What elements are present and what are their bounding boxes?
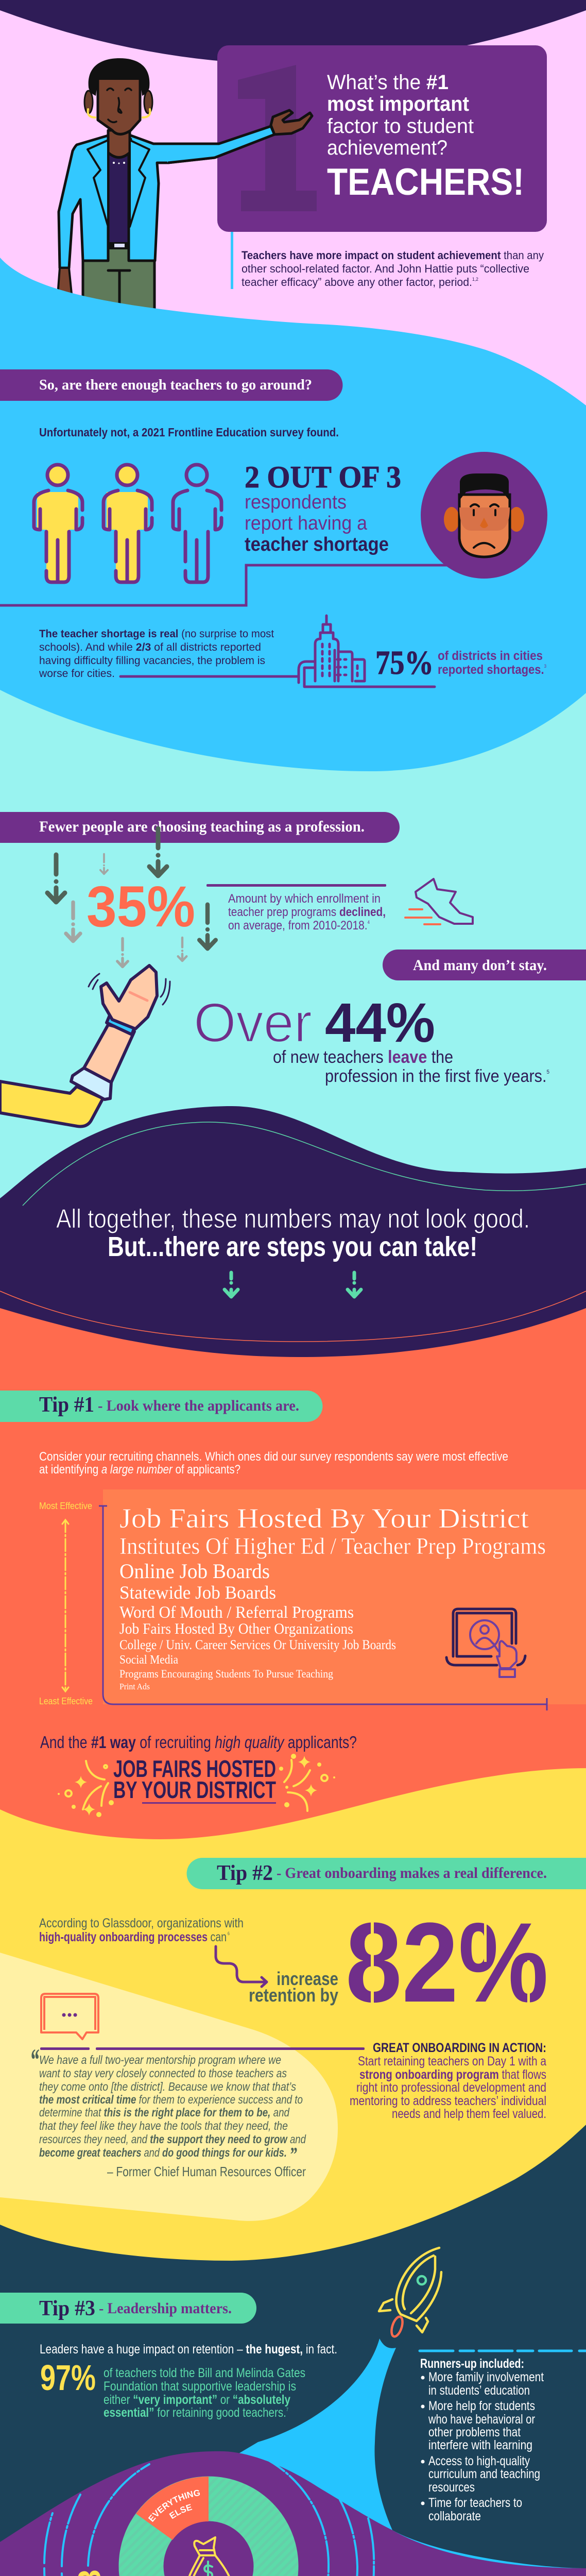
axis: most to least effective [39, 1501, 93, 1706]
heading: enough teachers [0, 369, 343, 401]
panel: navy transition wave: But...there are steps you can take! [108, 1231, 477, 1262]
ranked list of channels: Statewide Job Boards [119, 1582, 276, 1603]
donut chart: district budget share: EVERYTHING [148, 2489, 200, 2522]
stat: 97 percent: either “very important” or “absolutely [104, 2393, 290, 2407]
stat: over 44 percent: profession in the first five years. [325, 1066, 571, 1086]
stat: 2 out of 3 [245, 460, 401, 555]
headline question: factor to student [327, 115, 474, 138]
ranked list of channels: Job Fairs Hosted By Your District [119, 1503, 529, 1534]
icons: falling arrows [47, 828, 216, 967]
list: runners-up: More family involvement [428, 2370, 544, 2384]
stat: over 44 percent: Over [194, 991, 312, 1054]
heading: tip 2: - Great onboarding makes a real difference. [277, 1865, 547, 1882]
icons: green arrows [225, 1273, 361, 1297]
text: glassdoor finding: 6 [227, 1931, 230, 1936]
text block: great onboarding in action: needs and help them feel valued. [392, 2107, 546, 2121]
panel: headline card [157, 45, 547, 232]
axis: most to least effective: Most Effective [39, 1501, 92, 1511]
text block: teacher shortage: worse for cities. [39, 668, 115, 680]
text block: great onboarding in action [350, 2041, 546, 2121]
headline question: most important [327, 93, 469, 115]
stat: 75 percent: reported shortages. [438, 663, 559, 677]
text block: teacher shortage [39, 628, 274, 680]
text block: teacher impact [231, 232, 544, 289]
text block: mentorship quote: resources they need, and the support they need to grow and [39, 2132, 306, 2146]
axis: most to least effective: Least Effective [39, 1696, 93, 1706]
stat: 97 percent: essential” for retaining good teachers. [104, 2405, 315, 2420]
callout: job fairs hosted by your district: BY YOUR DISTRICT [113, 1776, 276, 1803]
headline question: achievement? [327, 137, 447, 159]
text block: teacher impact: teacher efficacy” above any other factor, period. [242, 276, 480, 289]
heading: tip 2: Tip #2 [217, 1861, 273, 1885]
donut chart: district budget share: ELSE [169, 2504, 193, 2519]
stat: 75 percent [375, 644, 546, 682]
stat: 97 percent: 7 [286, 2407, 288, 2412]
stat: over 44 percent: 44% [325, 991, 435, 1054]
text block: great onboarding in action: GREAT ONBOARDING IN ACTION: [373, 2041, 546, 2055]
icon: running shoe [405, 879, 473, 924]
text block: teacher shortage: schools). And while 2/3 of all districts reported [39, 641, 261, 653]
list: runners-up: other problems that [428, 2425, 521, 2439]
headline answer: TEACHERS! [327, 161, 524, 203]
text block: mentorship quote: want to stay very closely connected to those teachers as [39, 2066, 287, 2080]
text: glassdoor finding [39, 1916, 244, 1944]
heading: tip 1: Tip #1 [39, 1393, 94, 1417]
background: blue flame and section [0, 2338, 586, 2576]
background: yellow section [0, 1768, 586, 2267]
stat: 2 out of 3: report having a [245, 513, 368, 534]
background: navy top curve [0, 0, 586, 64]
text: glassdoor finding: high-quality onboarding processes can [39, 1930, 254, 1944]
ranked list of channels: College / Univ. Career Services Or University Job Boards [119, 1637, 396, 1652]
background: blue section [0, 258, 586, 771]
panel: navy transition wave [0, 1106, 586, 1357]
stat: 75 percent: 75% [375, 644, 434, 682]
illustration: teacher presenting [57, 58, 274, 313]
text block: mentorship quote: ” [289, 2144, 297, 2165]
text block: teacher impact: other school-related factor. And John Hattie puts “collective [242, 262, 529, 275]
ranked list of channels: Social Media [119, 1653, 178, 1667]
icon: city skyline [120, 616, 435, 687]
ranked list of channels: Programs Encouraging Students To Pursue Teaching [119, 1667, 333, 1680]
text block: great onboarding in action: Start retaining teachers on Day 1 with a [358, 2054, 546, 2069]
text: recruiting channels: at identifying a large number of applicants? [39, 1463, 240, 1477]
ranked list of channels [119, 1503, 546, 1691]
stat: over 44 percent: 5 [546, 1069, 549, 1075]
icon: money bag [188, 2537, 231, 2576]
ranked list of channels: Institutes Of Higher Ed / Teacher Prep Programs [119, 1533, 546, 1559]
icons: confetti [58, 1754, 335, 1817]
text block: great onboarding in action: mentoring to address teachers’ individual [350, 2094, 546, 2108]
list: runners-up: More help for students [428, 2399, 535, 2413]
list: runners-up: interfere with learning [428, 2438, 532, 2452]
illustration: waving arm [0, 965, 170, 1126]
text: survey intro: Unfortunately not, a 2021 Frontline Education survey found. [39, 426, 339, 439]
stat: 75 percent: 3 [544, 664, 546, 669]
text: number one recruiting way: And the #1 way of recruiting high quality applicants? [40, 1733, 357, 1752]
background: coral section [0, 1262, 586, 1844]
stat: 2 out of 3: teacher shortage [245, 534, 389, 555]
ranked list of channels: Online Job Boards [119, 1560, 270, 1583]
text: glassdoor finding: According to Glassdoor, organizations with [39, 1916, 244, 1930]
text block: mentorship quote: they come onto [the district]. Because we know that that’s [39, 2080, 296, 2093]
icons: three people, two filled [34, 465, 221, 582]
list: runners-up: resources [428, 2480, 475, 2495]
callout: job fairs hosted by your district [58, 1754, 335, 1817]
icon: laptop with candidate search [446, 1609, 525, 1677]
stat: 2 out of 3: 2 OUT OF 3 [245, 460, 401, 494]
background: pale teal section [0, 670, 586, 1211]
text block: mentorship quote: – Former Chief Human Resources Officer [107, 2164, 306, 2179]
heading: enough teachers: So, are there enough teachers to go around? [39, 377, 312, 393]
list: runners-up: Runners-up included: [420, 2357, 524, 2371]
heading: fewer people [0, 812, 400, 843]
ranked list of channels: Word Of Mouth / Referral Programs [119, 1603, 354, 1622]
heading: tip 1 [0, 1391, 322, 1422]
text: enrollment decline [206, 884, 386, 933]
heading: fewer people: Fewer people are choosing teaching as a profession. [39, 818, 365, 835]
text block: mentorship quote [30, 2043, 365, 2179]
heading: tip 3: Tip #3 [39, 2297, 95, 2320]
list: runners-up: Access to high-quality [428, 2454, 530, 2468]
text block: teacher shortage: having difficulty filling vacancies, the problem is [39, 655, 265, 667]
text: enrollment decline: teacher prep programs declined, [228, 905, 386, 919]
text: recruiting channels: Consider your recruiting channels. Which ones did our survey respondents say were most effective [39, 1450, 508, 1464]
text block: teacher impact: Teachers have more impact on student achievement than any [242, 249, 544, 262]
text: enrollment decline: on average, from 2010-2018. [228, 919, 388, 933]
text: enrollment decline: 4 [368, 920, 370, 925]
panel: recruiting channel ranking [39, 1489, 586, 1710]
background: pink hero [0, 0, 586, 412]
list: runners-up: in students’ education [428, 2383, 530, 2398]
text block: mentorship quote: “ [30, 2043, 39, 2077]
heading: many don't stay: And many don’t stay. [413, 957, 547, 974]
icon: speech bubble [41, 1994, 98, 2039]
background: dark teal section [0, 2125, 586, 2576]
stat: 82 percent retention: 82% [346, 1899, 548, 2026]
panel: budget blob [0, 2451, 586, 2576]
icon: worried face [0, 452, 547, 605]
heading: tip 2 [186, 1858, 586, 1889]
stat: over 44 percent: of new teachers leave the [273, 1047, 453, 1067]
heading: tip 1: - Look where the applicants are. [98, 1397, 299, 1414]
stat: 82 percent retention: retention by [249, 1985, 338, 2006]
stat: 97 percent [40, 2358, 305, 2420]
heading: tip 3 [0, 2293, 256, 2324]
icon: rocket [379, 2248, 441, 2338]
stat: 82 percent retention [249, 1899, 548, 2026]
concentric dashed arcs [44, 2455, 374, 2576]
text: enrollment decline: Amount by which enrollment in [228, 892, 381, 906]
text block: mentorship quote: become great teachers and do good things for our kids. [39, 2146, 319, 2159]
stat: 97 percent: 97% [40, 2358, 96, 2398]
text: leaders impact: Leaders have a huge impact on retention – the hugest, in fact. [40, 2342, 337, 2357]
list: runners-up: Time for teachers to [428, 2496, 522, 2510]
stat: 35 percent: 35% [87, 874, 195, 939]
stat: 2 out of 3: respondents [245, 492, 347, 513]
arm overlapping card [157, 126, 274, 163]
text block: mentorship quote: We have a full two-year mentorship program where we [39, 2053, 281, 2066]
list: runners-up [420, 2351, 586, 2523]
text block: great onboarding in action: right into professional development and [356, 2080, 546, 2095]
stat: over 44 percent [194, 991, 549, 1086]
list: runners-up: collaborate [428, 2509, 481, 2523]
text: recruiting channels [39, 1450, 508, 1477]
stat: 97 percent: Foundation that supportive leadership is [104, 2379, 296, 2394]
big number 1 [238, 65, 317, 211]
text block: mentorship quote: the most critical time for them to experience success and to [39, 2093, 303, 2106]
heading: many don't stay [383, 950, 586, 980]
ranked list of channels: Print Ads [119, 1682, 150, 1691]
text block: mentorship quote: determine that this is the right place for them to be, and [39, 2106, 290, 2119]
list: runners-up: who have behavioral or [428, 2412, 535, 2427]
heading: tip 3: - Leadership matters. [99, 2300, 232, 2317]
text block: mentorship quote: that they feel like they have the tools that they need, the [39, 2119, 288, 2132]
stat: 82 percent retention: increase [277, 1968, 338, 1989]
stat: 75 percent: of districts in cities [438, 649, 543, 663]
callout: job fairs hosted by your district: JOB FAIRS HOSTED [113, 1755, 276, 1782]
text block: teacher shortage: The teacher shortage is real (no surprise to most [39, 628, 274, 640]
ranked list of channels: Job Fairs Hosted By Other Organizations [119, 1620, 353, 1637]
background: pale yellow quote blob [0, 1953, 338, 2221]
stat: 97 percent: of teachers told the Bill and Melinda Gates [104, 2366, 305, 2380]
arrow: to increase retention [216, 1946, 267, 1987]
headline question: What’s the #1 [327, 71, 449, 94]
headline question [327, 71, 474, 159]
text block: teacher impact: 1,2 [472, 277, 478, 282]
text block: great onboarding in action: strong onboarding program that flows [359, 2067, 546, 2082]
donut chart: district budget share [118, 2476, 299, 2576]
list: runners-up: curriculum and teaching [428, 2467, 540, 2481]
